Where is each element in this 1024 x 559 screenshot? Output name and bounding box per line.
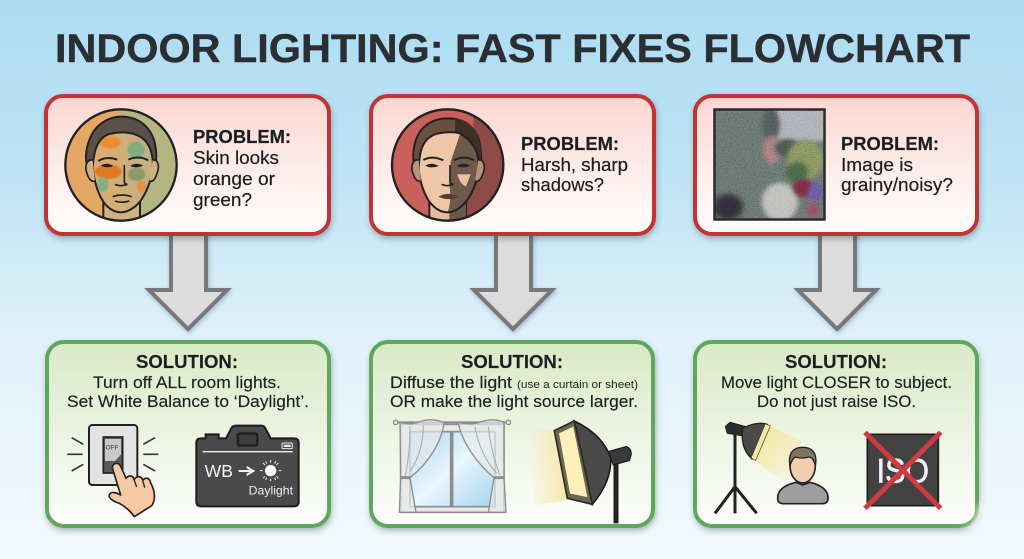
text: solution 3	[721, 352, 952, 411]
text: problem 3: Image is	[841, 155, 913, 175]
text: solution 3: SOLUTION:	[785, 352, 887, 372]
text: problem 2: Harsh, sharp	[521, 155, 628, 175]
text: solution 3: Move light CLOSER to subject.	[721, 373, 952, 392]
icon: face with colour cast	[63, 108, 179, 222]
icon: noisy photo	[713, 105, 831, 221]
icon: camera white balance daylight: WB	[205, 461, 233, 481]
panel: solution 2	[371, 342, 653, 526]
panel: problem skin colour	[46, 96, 329, 234]
text: problem 2: shadows?	[521, 175, 604, 195]
corner highlight	[958, 500, 985, 530]
text: solution 1: Turn off ALL room lights.	[93, 373, 281, 392]
text: solution 2: SOLUTION:	[461, 352, 563, 372]
text: solution 2: (use a curtain or sheet)	[517, 379, 638, 391]
icon: face with hard shadow	[390, 108, 507, 222]
panel: solution 1	[47, 342, 329, 526]
text: problem 1: green?	[193, 190, 252, 210]
text: problem 3: grainy/noisy?	[841, 175, 953, 195]
text: solution 2	[390, 352, 638, 411]
text: problem 2: PROBLEM:	[521, 134, 619, 154]
icon: camera white balance daylight: Daylight	[249, 485, 294, 498]
panel: problem harsh shadows	[371, 96, 654, 234]
text: solution 1: Set White Balance to ‘Daylight’.	[67, 392, 309, 411]
panel: solution 3	[695, 342, 985, 530]
text: problem 3: PROBLEM:	[841, 134, 939, 154]
text: solution 2: Diffuse the light	[390, 373, 512, 392]
text: problem 3	[841, 134, 953, 195]
text: problem 2	[521, 134, 628, 195]
text: solution 3: Do not just raise ISO.	[757, 392, 916, 411]
icon: lamp on tripod lighting a person	[715, 422, 828, 513]
panel: problem grainy image	[695, 96, 977, 234]
icon: crossed out ISO: ISO	[877, 452, 929, 490]
icon: light switch with hand: OFF	[106, 444, 118, 451]
arrow: problem 2 to solution 2	[474, 232, 552, 329]
icon: softbox light	[527, 421, 631, 523]
arrow: problem 3 to solution 3	[798, 232, 876, 329]
text: solution 2: OR make the light source larger.	[390, 392, 638, 411]
arrow: problem 1 to solution 1	[149, 232, 227, 329]
text: problem 1: orange or	[193, 169, 275, 189]
icon: camera white balance daylight	[196, 426, 299, 506]
text: solution 1: SOLUTION:	[136, 352, 238, 372]
text: solution 1	[67, 352, 309, 411]
title: INDOOR LIGHTING: FAST FIXES FLOWCHART	[55, 27, 970, 71]
icon: light switch with hand	[67, 425, 158, 517]
text: problem 1	[193, 127, 291, 210]
text: problem 1: Skin looks	[193, 148, 279, 168]
icon: window with curtains	[393, 420, 511, 512]
icon: crossed out ISO	[865, 432, 941, 508]
text: problem 1: PROBLEM:	[193, 127, 291, 147]
